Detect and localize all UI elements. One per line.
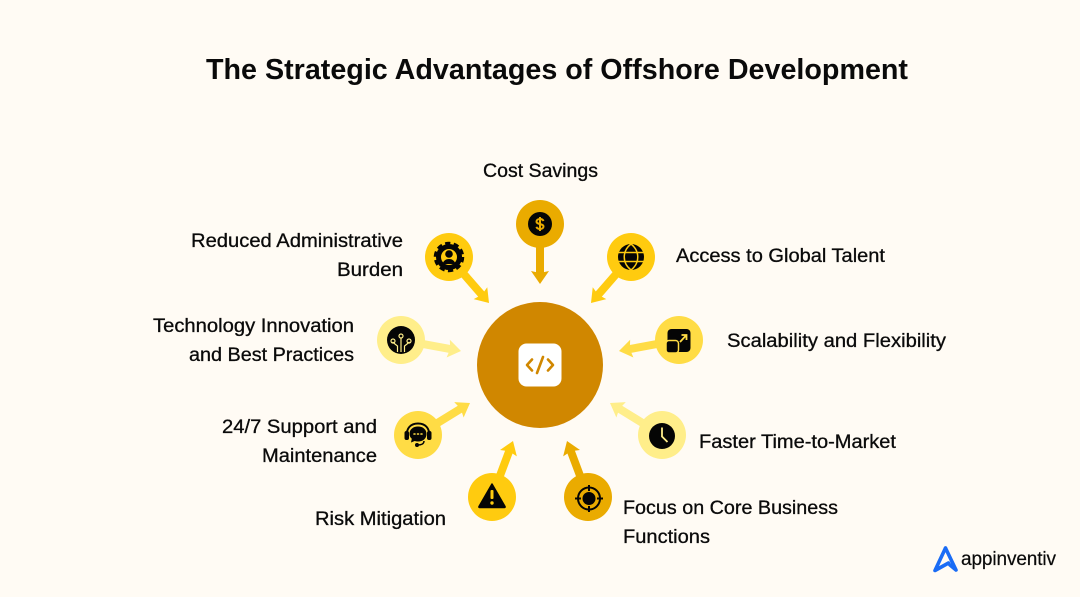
- icon: headset chat: [394, 411, 442, 459]
- label: technology innovation: and Best Practices: [189, 345, 354, 366]
- title: The Strategic Advantages of Offshore Development: [206, 54, 908, 86]
- label: reduced administrative burden: [191, 231, 403, 281]
- label: technology innovation: [153, 316, 354, 366]
- arrow: access to global talent: [584, 251, 638, 309]
- arrow: reduced administrative burden: [442, 251, 496, 309]
- label: 24/7 support: Maintenance: [262, 446, 377, 467]
- label: 24/7 support: 24/7 Support and: [222, 417, 377, 438]
- label: reduced administrative burden: Burden: [337, 260, 403, 281]
- arrow: risk mitigation: [483, 438, 521, 500]
- label: reduced administrative burden: Reduced Administrative: [191, 231, 403, 252]
- item: access to global talent: [584, 233, 886, 309]
- label: technology innovation: Technology Innovation: [153, 316, 354, 337]
- arrow: cost savings: [531, 224, 549, 284]
- icon: circuit bulb: [377, 316, 425, 364]
- label: scalability and flexibility: Scalability and Flexibility: [727, 331, 947, 352]
- arrow: focus on core business functions: [559, 438, 597, 500]
- logo: appinventiv: [935, 548, 1056, 570]
- arrow: scalability and flexibility: [617, 331, 681, 360]
- item: technology innovation: [153, 316, 463, 366]
- icon: dollar coin: [516, 200, 564, 248]
- logo wordmark: appinventiv: [961, 549, 1056, 570]
- label: risk mitigation: Risk Mitigation: [315, 509, 446, 530]
- label: focus on core business functions: Focus on Core Business: [623, 498, 838, 519]
- item: 24/7 support: [222, 395, 475, 467]
- icon: scale up square: [655, 316, 703, 364]
- item: faster time-to-market: [605, 395, 897, 459]
- central hub: [477, 302, 603, 428]
- icon: clock: [638, 411, 686, 459]
- label: focus on core business functions: [623, 498, 838, 548]
- icon: globe: [607, 233, 655, 281]
- label: 24/7 support: [222, 417, 377, 467]
- label: focus on core business functions: Functions: [623, 527, 710, 548]
- icon: warning triangle: [468, 473, 516, 521]
- item: focus on core business functions: [559, 438, 838, 548]
- item: risk mitigation: [315, 438, 521, 530]
- arrow: 24/7 support: [413, 395, 475, 443]
- label: access to global talent: Access to Global Talent: [676, 246, 886, 267]
- icon: logo mark: [935, 548, 956, 570]
- label: faster time-to-market: Faster Time-to-Market: [699, 432, 897, 453]
- item: scalability and flexibility: [617, 316, 947, 364]
- item: cost savings: [483, 161, 598, 284]
- icon: target: [564, 473, 612, 521]
- arrow: technology innovation: [399, 331, 463, 360]
- arrow: faster time-to-market: [605, 395, 667, 443]
- item: reduced administrative burden: [191, 231, 496, 309]
- label: cost savings: Cost Savings: [483, 161, 598, 182]
- icon: gear with person: [425, 233, 473, 281]
